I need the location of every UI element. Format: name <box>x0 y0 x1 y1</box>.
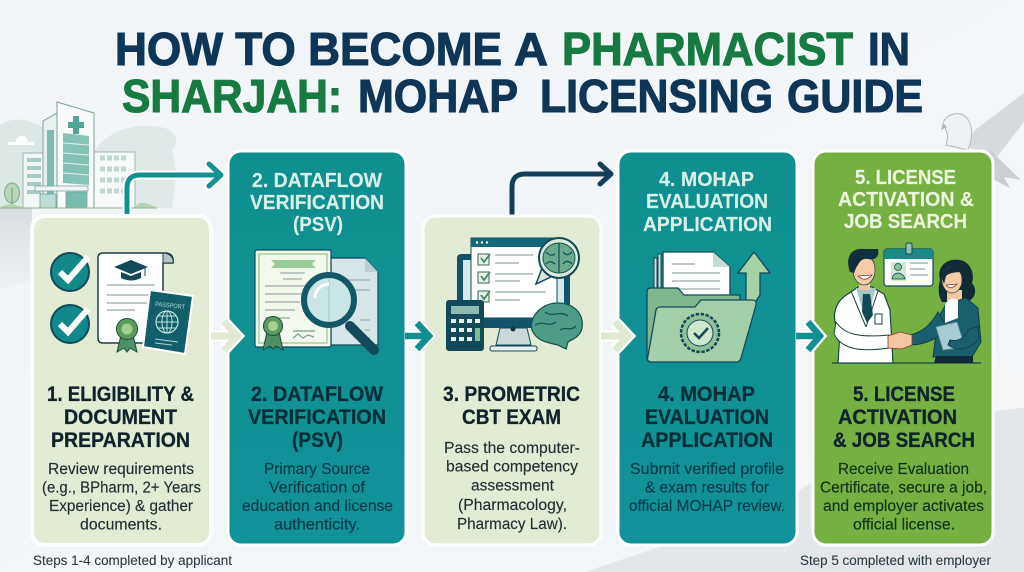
flow arrow: 1 to 2 <box>211 322 237 350</box>
step 2 description: education and license <box>242 498 393 515</box>
connector arrow: step 3 to step 4 <box>512 164 611 216</box>
step 4 description: official MOHAP review. <box>629 498 785 515</box>
step 1 description: Review requirements <box>48 461 194 478</box>
step 5 heading <box>833 383 975 452</box>
step 2 heading <box>248 383 386 452</box>
step 1 description: (e.g., BPharm, 2+ Years <box>42 480 201 496</box>
title: PHARMACIST <box>562 23 853 75</box>
panel: step 4 card <box>618 151 797 545</box>
step 3 description <box>444 440 580 533</box>
title: LICENSING <box>540 70 773 122</box>
panel: step 5 card <box>813 151 993 545</box>
step 3 heading: CBT EXAM <box>462 406 561 429</box>
step 5 description: Certificate, secure a job, <box>820 480 987 496</box>
flow arrow: 3 to 4 <box>601 322 628 350</box>
panel: step 3 card <box>423 216 601 545</box>
icon: pharmacist and employer shaking hands with ID badge <box>832 243 981 363</box>
step 4 top heading: EVALUATION <box>646 191 768 213</box>
icon: folder with documents and upload arrow <box>647 252 770 362</box>
footnote: employer step: Step 5 completed with employer <box>800 553 991 568</box>
step 2 top heading: 2. DATAFLOW <box>252 170 382 192</box>
step 5 description <box>820 461 987 534</box>
panel: step 2 card <box>228 151 406 545</box>
panel: step 1 card <box>32 216 211 545</box>
step 5 top heading: JOB SEARCH <box>844 211 967 233</box>
step 5 heading: & JOB SEARCH <box>833 429 975 452</box>
step 3 heading <box>443 383 580 429</box>
step 5 top heading: ACTIVATION & <box>838 189 974 211</box>
step 3 description: assessment <box>471 478 555 494</box>
step 2 heading: 2. DATAFLOW <box>251 383 383 406</box>
step 3 description: based competency <box>446 458 578 476</box>
step 3 description: Pass the computer- <box>444 440 580 457</box>
title: GUIDE <box>787 70 923 122</box>
step 2 top heading: VERIFICATION <box>250 192 384 214</box>
step 4 heading: APPLICATION <box>641 429 773 452</box>
step 1 description: documents. <box>80 516 162 534</box>
title: HOW TO BECOME <box>115 23 502 75</box>
step 4 top heading <box>643 169 772 236</box>
icon: checklist, diploma and passport <box>51 253 193 354</box>
step 2 description: Verification of <box>269 480 366 496</box>
step 1 heading: PREPARATION <box>51 429 190 452</box>
flow arrow: 4 to 5 <box>796 322 820 350</box>
step 2 heading: VERIFICATION <box>248 406 386 429</box>
step 4 description: Submit verified profile <box>630 461 784 478</box>
eagle watermark <box>941 93 1024 188</box>
title: IN <box>868 23 910 75</box>
icon: certificate with magnifying glass <box>255 250 378 350</box>
title: MOHAP <box>358 70 518 122</box>
step 5 heading: ACTIVATION <box>838 406 957 429</box>
step 4 heading: EVALUATION <box>645 406 769 429</box>
step 1 description <box>42 461 201 534</box>
step 1 heading: DOCUMENT <box>64 406 177 429</box>
step 3 description: (Pharmacology, <box>458 497 567 514</box>
step 5 description: official license. <box>853 516 955 534</box>
step 4 description: & exam results for <box>645 480 769 496</box>
title: SHARJAH: <box>122 70 342 122</box>
step 4 heading <box>641 383 773 452</box>
flow arrow: 2 to 3 <box>405 323 429 349</box>
step 4 description <box>629 461 785 515</box>
step 4 top heading: APPLICATION <box>643 214 772 236</box>
step 5 top heading <box>838 167 974 233</box>
step 3 heading: 3. PROMETRIC <box>443 383 580 406</box>
step 2 heading: (PSV) <box>292 429 343 452</box>
step 2 description: Primary Source <box>264 461 370 478</box>
step 5 top heading: 5. LICENSE <box>855 167 956 189</box>
step 2 top heading: (PSV) <box>293 214 343 236</box>
step 2 top heading <box>250 170 384 236</box>
footnote: applicant steps: Steps 1-4 completed by applicant <box>33 553 232 568</box>
step 5 description: Receive Evaluation <box>838 461 969 478</box>
icon: checklist, diploma and passport: PASSPORT <box>155 301 185 311</box>
step 4 heading: 4. MOHAP <box>658 383 755 406</box>
step 1 heading <box>47 383 194 452</box>
hospital skyline illustration <box>0 102 176 208</box>
step 5 heading: 5. LICENSE <box>853 383 955 406</box>
step 1 heading: 1. ELIGIBILITY & <box>47 383 194 406</box>
connector arrow: step 1 to step 2 <box>127 164 221 216</box>
title <box>115 23 923 122</box>
step 2 description: authenticity. <box>274 516 360 534</box>
step 2 description <box>242 461 393 534</box>
step 5 description: and employer activates <box>823 498 984 515</box>
icon: computer exam with calculator and brain <box>446 238 582 351</box>
step 1 description: Experience) & gather <box>49 498 193 515</box>
title: A <box>514 23 548 75</box>
step 4 top heading: 4. MOHAP <box>659 169 754 191</box>
step 3 description: Pharmacy Law). <box>457 516 567 533</box>
